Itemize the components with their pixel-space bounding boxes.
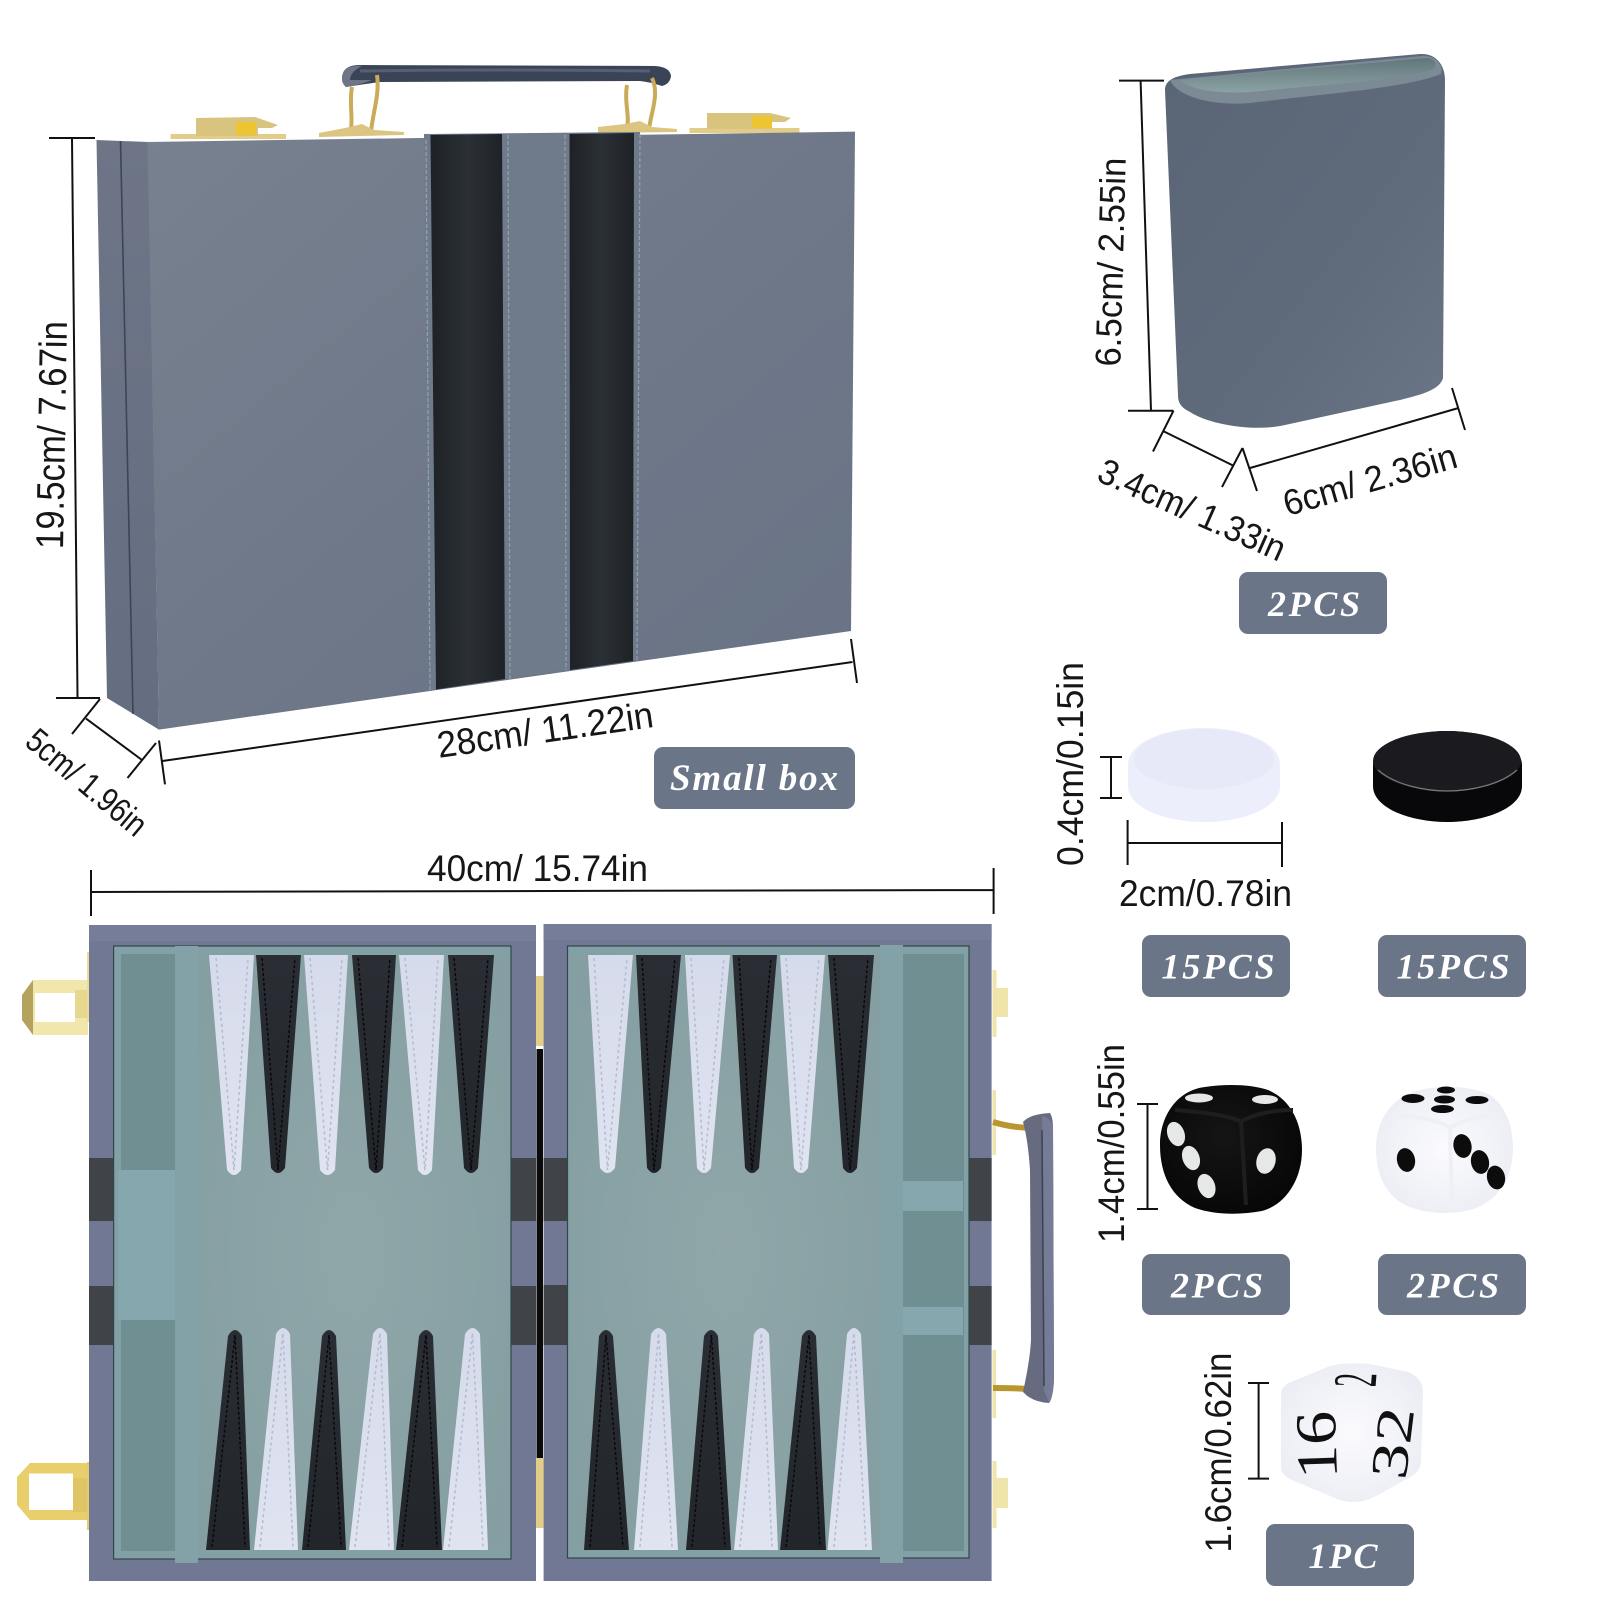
right frame — [544, 924, 992, 1581]
left tray liner — [114, 946, 511, 1559]
cube numbers: 2 — [1321, 1372, 1391, 1388]
stitching — [426, 134, 640, 690]
left frame — [89, 925, 536, 1581]
left divider wall — [175, 946, 198, 1563]
left bottom points — [206, 1328, 488, 1550]
right felt — [570, 954, 880, 1551]
cup height dimension — [1087, 81, 1174, 411]
left board panel — [89, 925, 536, 1581]
box height dimension: 19.5cm/ 7.67in — [29, 321, 76, 549]
badge: black dice: 2PCS — [1170, 1266, 1263, 1306]
box depth dimension — [18, 699, 156, 844]
open case handle — [993, 1113, 1054, 1403]
dice cup — [1165, 54, 1445, 428]
brass latches — [170, 113, 800, 139]
cube height dimension: 1.6cm/0.62in — [1198, 1352, 1239, 1552]
box handle — [342, 65, 671, 87]
cube numbers — [1283, 1372, 1426, 1482]
box front — [148, 132, 855, 730]
left compartment — [121, 954, 175, 1551]
badge: white dice — [1378, 1254, 1526, 1315]
box width dimension: 28cm/ 11.22in — [434, 694, 656, 766]
handle rings and feet — [319, 75, 677, 137]
white checker — [1128, 728, 1280, 822]
cup depth dimension — [1092, 411, 1292, 569]
white die — [1376, 1086, 1513, 1213]
cup depth dimension: 3.4cm/ 1.33in — [1092, 450, 1292, 569]
die height dimension: 1.4cm/0.55in — [1091, 1044, 1132, 1243]
left felt — [198, 954, 509, 1551]
box depth dimension: 5cm/ 1.96in — [18, 721, 154, 844]
open width dimension — [91, 848, 994, 916]
checker height dimension — [1050, 662, 1122, 866]
black checker — [1373, 731, 1522, 822]
badge: cup quantity — [1239, 572, 1387, 634]
cube numbers: 16 — [1283, 1410, 1350, 1480]
hinge — [536, 976, 544, 1528]
box seam — [120, 141, 133, 714]
cube height dimension — [1198, 1352, 1269, 1552]
badge: white checkers — [1142, 935, 1290, 997]
badge: black checkers: 15PCS — [1396, 946, 1510, 986]
box side — [96, 140, 159, 730]
black die pips — [1164, 1094, 1279, 1201]
badge: black checkers — [1378, 935, 1526, 997]
black die — [1160, 1085, 1302, 1214]
cube numbers: 32 — [1361, 1404, 1426, 1482]
cup height dimension: 6.5cm/ 2.55in — [1087, 157, 1134, 367]
centre panel — [424, 132, 640, 690]
badge: black dice — [1142, 1254, 1290, 1315]
left compartment bridge — [118, 1170, 177, 1320]
right edge clips — [992, 970, 1008, 1528]
cup body — [1165, 54, 1445, 428]
right compartment bridges — [903, 1181, 963, 1335]
badge: cup quantity: 2PCS — [1267, 584, 1360, 624]
badge: small box — [654, 747, 855, 809]
cup rim — [1170, 56, 1442, 104]
black strap 2 — [570, 133, 634, 670]
badge: white checkers: 15PCS — [1162, 946, 1274, 986]
clasps — [17, 952, 90, 1530]
white die pips — [1395, 1086, 1507, 1191]
badge: white dice: 2PCS — [1406, 1266, 1499, 1306]
right divider wall — [880, 945, 903, 1563]
cup width dimension: 6cm/ 2.36in — [1278, 435, 1462, 524]
black die ridges — [1175, 1110, 1293, 1205]
checker width dimension — [1119, 820, 1292, 914]
right top points — [588, 955, 874, 1173]
doubling cube — [1281, 1363, 1426, 1502]
badge: small box: Small box — [670, 758, 838, 799]
white die ridges — [1392, 1115, 1502, 1205]
box height dimension — [29, 138, 100, 698]
right frame straps — [544, 1158, 992, 1345]
right bottom points — [584, 1328, 872, 1550]
right board panel — [544, 924, 992, 1581]
left frame straps — [89, 1158, 536, 1345]
badge: cube: 1PC — [1308, 1536, 1378, 1576]
right compartment — [903, 954, 964, 1551]
left top points — [209, 955, 494, 1175]
black strap 1 — [430, 134, 505, 690]
small closed box — [96, 65, 855, 730]
cup width dimension — [1242, 388, 1465, 524]
box width dimension — [159, 639, 857, 784]
checker width dimension: 2cm/0.78in — [1119, 873, 1292, 914]
open width dimension: 40cm/ 15.74in — [427, 848, 648, 889]
right tray liner — [568, 946, 969, 1558]
die height dimension — [1091, 1044, 1158, 1243]
badge: cube — [1266, 1524, 1414, 1586]
cup lining — [1180, 58, 1435, 92]
checker height dimension: 0.4cm/0.15in — [1050, 662, 1091, 866]
